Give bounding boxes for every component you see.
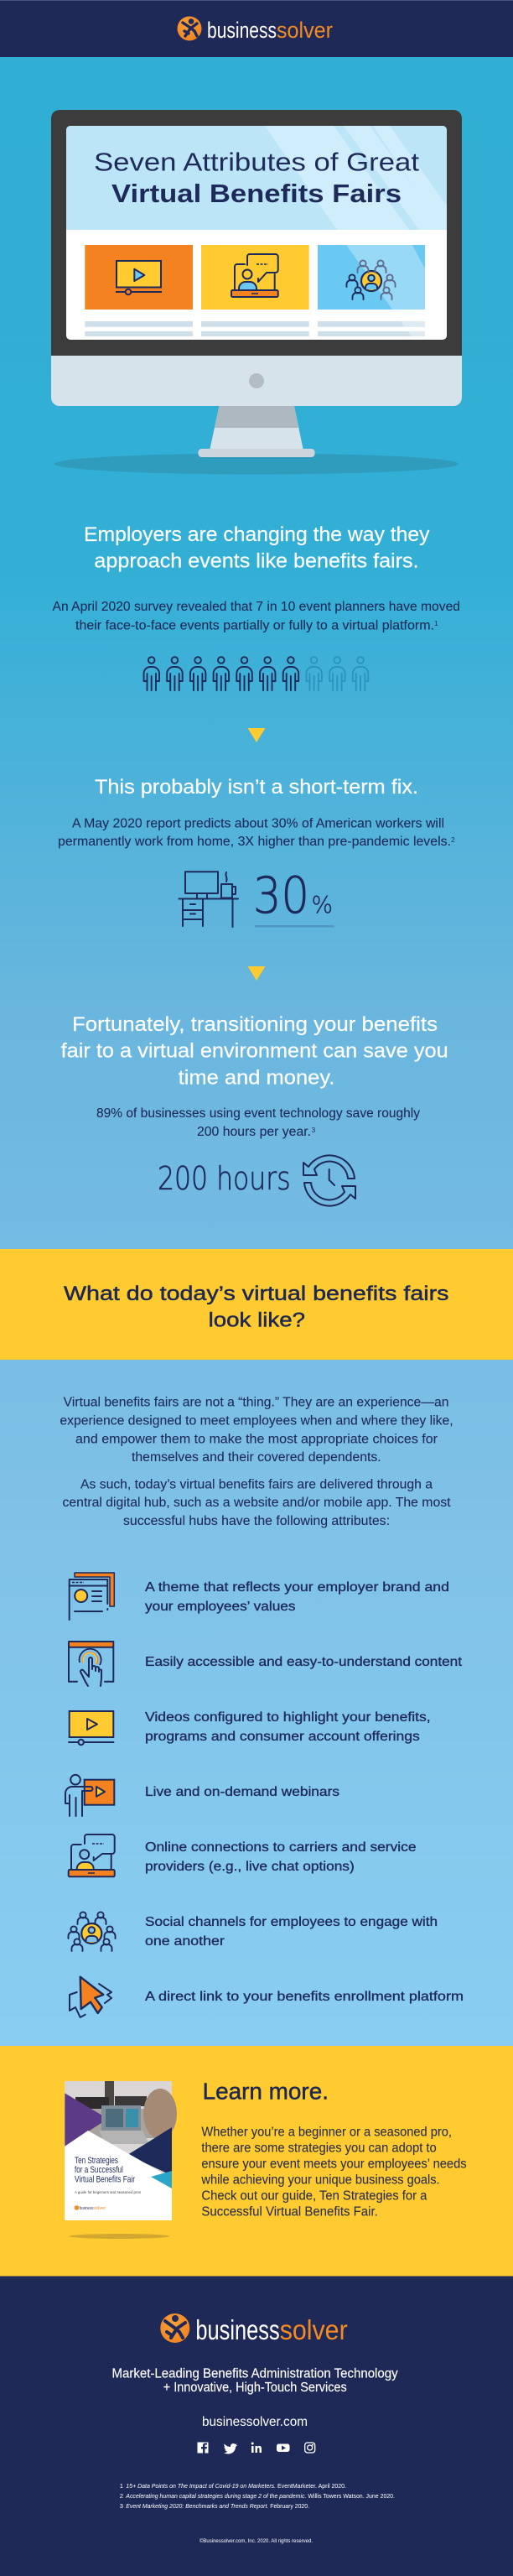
attribute 5	[69, 1834, 416, 1876]
text	[145, 1580, 449, 1614]
social icons	[198, 2443, 315, 2454]
stat: 30%: %	[312, 891, 333, 919]
heading: This probably isn’t a short-term fix.	[95, 776, 418, 799]
icon: twitter	[224, 2443, 237, 2454]
footnotes: 1	[120, 2482, 123, 2490]
text block	[200, 2126, 467, 2219]
text block: their face-to-face events partially or fully to a virtual platform.	[75, 618, 434, 632]
icon: youtube	[277, 2444, 290, 2452]
text block: while achieving your unique business goals.	[200, 2173, 440, 2187]
attribute 3	[68, 1710, 431, 1745]
icon: home desk	[179, 872, 238, 927]
attribute list	[65, 1573, 464, 2017]
text block: intro	[60, 1396, 453, 1528]
text block: there are some strategies you can adopt to	[201, 2141, 437, 2155]
section: employers changing	[52, 523, 460, 690]
arrow	[248, 966, 265, 981]
tile: video	[85, 245, 193, 310]
icon: instagram	[305, 2443, 315, 2453]
icon: social group	[69, 1912, 116, 1951]
text block: intro: and empower them to make the most appropriate choices for	[75, 1433, 438, 1446]
placeholder text lines	[85, 321, 425, 336]
heading: Employers are changing the way they	[84, 523, 430, 546]
text: one another	[145, 1934, 225, 1949]
text block	[58, 817, 455, 849]
icon: clock with arrows	[303, 1155, 355, 1206]
footnotes: 3	[120, 2502, 123, 2510]
panel: learn more	[0, 2046, 513, 2277]
heading	[61, 1013, 448, 1090]
text block: 3	[312, 1126, 315, 1134]
attribute 1	[70, 1573, 449, 1620]
footnotes: Accelerating human capital strategies during stage 2 of the pandemic. Willis Towers Watson. June 2020.	[125, 2492, 395, 2500]
book cover	[65, 2081, 177, 2239]
text block: Whether you’re a beginner or a seasoned pro,	[201, 2126, 452, 2139]
text: A direct link to your benefits enrollment platform	[145, 1990, 464, 2004]
book cover: A guide for beginners and seasoned pros	[75, 2190, 141, 2194]
attribute 6	[69, 1912, 438, 1951]
arrow	[248, 728, 265, 742]
footnotes: 2	[120, 2492, 123, 2500]
tile: live chat	[201, 245, 309, 310]
text: Social channels for employees to engage with	[145, 1915, 438, 1929]
monitor body	[51, 356, 462, 406]
footnotes: Event Marketing 2020: Benchmarks and Trends Report. February 2020.	[126, 2502, 309, 2510]
logo: businessolver header: business	[207, 18, 277, 43]
logo: businessolver footer: solver	[280, 2314, 348, 2345]
panel: footer	[0, 2277, 513, 2576]
text: Online connections to carriers and service	[145, 1840, 416, 1855]
book cover: for a Successful	[75, 2165, 123, 2175]
text block	[52, 600, 460, 632]
heading: fair to a virtual environment can save you	[61, 1040, 448, 1062]
text block: 89% of businesses using event technology save roughly	[96, 1106, 420, 1121]
icon: video	[68, 1711, 114, 1745]
header bar	[0, 0, 513, 57]
text block: intro: successful hubs have the following attributes:	[123, 1514, 390, 1528]
monitor illustration	[51, 110, 462, 475]
icon: facebook	[198, 2443, 208, 2453]
logo: businessolver footer: business	[195, 2314, 280, 2345]
screen title	[94, 148, 419, 208]
attribute 7	[70, 1977, 464, 2017]
text: A theme that reflects your employer brand and	[145, 1580, 449, 1595]
book cover: business	[80, 2206, 93, 2211]
text: your employees’ values	[145, 1600, 296, 1614]
tagline: Market-Leading Benefits Administration Technology	[112, 2367, 398, 2381]
text: Videos configured to highlight your benefits,	[145, 1710, 431, 1725]
icon: cursors	[70, 1977, 111, 2017]
attribute 4	[65, 1775, 339, 1816]
screen title: Seven Attributes of Great	[94, 148, 419, 176]
monitor screen	[66, 126, 447, 340]
section: save time and money	[61, 1013, 448, 1206]
text block: A May 2020 report predicts about 30% of American workers will	[72, 817, 444, 830]
screen title: Virtual Benefits Fairs	[111, 179, 402, 208]
logo: businessolver header: solver	[277, 18, 333, 43]
tagline	[112, 2367, 398, 2395]
section: short-term fix	[58, 776, 455, 928]
text block: ensure your event meets your employees’ needs	[201, 2157, 467, 2171]
text	[145, 1840, 416, 1874]
text block	[96, 1106, 420, 1139]
text	[145, 1915, 438, 1949]
icon: branded page	[70, 1573, 114, 1620]
text: providers (e.g., live chat options)	[145, 1860, 355, 1874]
footnotes	[120, 2482, 395, 2510]
website: businessolver.com	[202, 2415, 308, 2429]
text block: Check out our guide, Ten Strategies for a	[201, 2189, 428, 2204]
text	[145, 1710, 431, 1744]
heading: Learn more.	[203, 2078, 329, 2104]
tile: social	[318, 245, 425, 310]
tagline: + Innovative, High-Touch Services	[163, 2381, 347, 2395]
monitor stand	[198, 406, 315, 457]
text block: An April 2020 survey revealed that 7 in 10 event planners have moved	[52, 600, 460, 614]
logo: businessolver footer	[160, 2313, 348, 2345]
book cover: Virtual Benefits Fair	[75, 2175, 135, 2185]
text block: 1	[434, 619, 438, 627]
text block: intro: As such, today’s virtual benefits fairs are delivered through a	[80, 1478, 433, 1491]
band: what do fairs look like: look like?	[209, 1309, 305, 1332]
book cover: solver	[93, 2206, 106, 2211]
heading	[84, 523, 430, 572]
stat: 200 hours: 200 hours	[158, 1160, 291, 1197]
text: Live and on-demand webinars	[145, 1785, 339, 1799]
background	[0, 0, 513, 2047]
heading: Fortunately, transitioning your benefits	[72, 1013, 438, 1036]
icon: online chat	[69, 1834, 115, 1876]
band: what do fairs look like: What do today’s virtual benefits fairs	[64, 1283, 449, 1305]
icon: webinar presenter	[65, 1775, 114, 1816]
text: Easily accessible and easy-to-understand content	[145, 1655, 463, 1669]
footnotes: 15+ Data Points on The Impact of Covid-19 on Marketers. EventMarketer. April 2020.	[126, 2482, 346, 2490]
copyright: ©Businessolver.com, Inc. 2020. All rights reserved.	[200, 2538, 313, 2544]
book cover: Ten Strategies	[75, 2156, 118, 2166]
text block: intro: experience designed to meet employees when and where they like,	[60, 1414, 453, 1429]
stat: 30%: 30	[253, 866, 309, 925]
text block: intro: Virtual benefits fairs are not a “thing.” They are an experience—an	[64, 1396, 448, 1409]
icon: touch window	[69, 1642, 113, 1686]
text block: 200 hours per year.	[197, 1125, 311, 1139]
logo: businessolver header	[178, 17, 333, 43]
text block: intro: central digital hub, such as a website and/or mobile app. The most	[62, 1496, 451, 1510]
text block: Successful Virtual Benefits Fair.	[201, 2204, 378, 2219]
text block: 2	[451, 835, 455, 844]
text block: permanently work from home, 3X higher than pre-pandemic levels.	[58, 835, 451, 849]
band: what do fairs look like	[0, 1249, 513, 1360]
text block: intro: themselves and their covered dependents.	[132, 1450, 381, 1465]
text: programs and consumer account offerings	[145, 1730, 420, 1744]
icon: linkedin	[251, 2443, 262, 2453]
heading: time and money.	[179, 1067, 334, 1090]
attribute 2	[69, 1642, 463, 1686]
heading: approach events like benefits fairs.	[94, 550, 419, 572]
pictogram: 7 in 10 people	[144, 657, 368, 690]
